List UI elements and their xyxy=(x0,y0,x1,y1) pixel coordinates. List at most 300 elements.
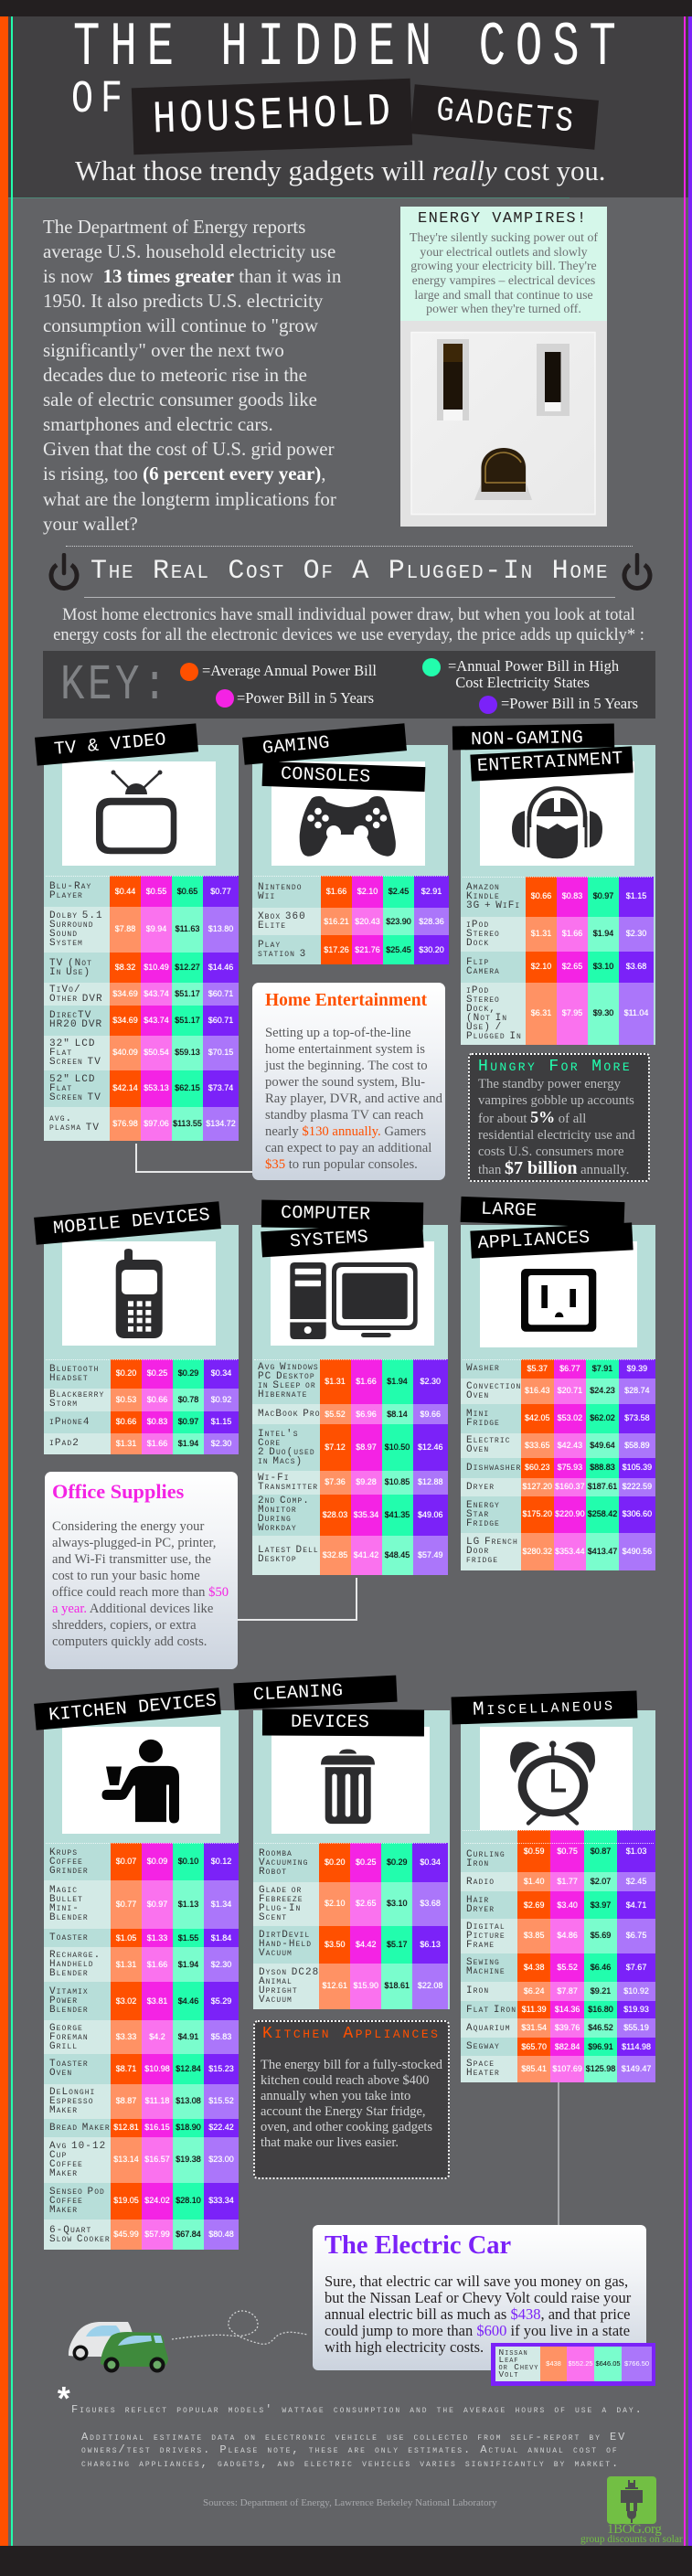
table: computer system costs: $12.88 xyxy=(418,1477,443,1486)
heading tag: kitchen devices: KITCHEN DEVICES xyxy=(48,1690,218,1725)
callout text: nearly $130 annually. Gamers xyxy=(265,1124,426,1139)
table: mobile device costs: Headset xyxy=(49,1373,89,1384)
table: computer system costs: Hibernate xyxy=(258,1389,307,1400)
table: kitchen device costs: $0.07 xyxy=(116,1857,136,1866)
heading tag: computer: COMPUTER xyxy=(281,1203,371,1226)
table: kitchen device costs: Coffee xyxy=(49,2159,83,2170)
table: kitchen device costs: Coffee xyxy=(49,2196,83,2207)
callout text: always-plugged-in PC, printer, xyxy=(52,1536,216,1550)
table: non-gaming entertainment costs: $3.10 xyxy=(593,962,613,971)
table: miscellaneous costs: $55.19 xyxy=(623,2023,649,2032)
table: mobile device costs: Storm xyxy=(49,1399,78,1410)
callout text: Ray player, DVR, and active and xyxy=(265,1091,442,1106)
table: mobile device costs: Blackberry xyxy=(49,1389,104,1400)
table: kitchen device costs: $2.30 xyxy=(211,1960,231,1969)
callout heading: Home Entertainment xyxy=(265,991,427,1010)
table: miscellaneous costs: $2.45 xyxy=(626,1877,646,1886)
intro paragraph: Given that the cost of U.S. grid power xyxy=(43,438,335,460)
intro paragraph: The Department of Energy reports xyxy=(43,216,305,238)
table: kitchen device costs: $0.77 xyxy=(116,1900,136,1909)
table: large appliance costs: $175.20 xyxy=(523,1509,552,1518)
table: cleaning device costs: $6.13 xyxy=(420,1940,441,1949)
table: electric car costs xyxy=(491,2343,655,2386)
table: mobile device costs: $0.34 xyxy=(211,1368,231,1378)
table: kitchen device costs: Grinder xyxy=(49,1866,89,1877)
panel: TV and video xyxy=(44,745,239,1141)
table: large appliance costs: $222.59 xyxy=(623,1482,652,1491)
table: TV and video costs: TiVo/ xyxy=(49,985,81,995)
table: miscellaneous costs: Iron xyxy=(466,1858,489,1869)
table: TV and video costs: $60.71 xyxy=(208,1016,233,1025)
title line: the hidden cost: THE HIDDEN COST xyxy=(73,13,626,83)
table: kitchen device costs xyxy=(44,1843,239,2250)
title label: household xyxy=(132,79,412,154)
icon: green robot plug xyxy=(607,2476,656,2524)
table: TV and video costs: $14.46 xyxy=(208,963,233,972)
table: computer system costs: $1.94 xyxy=(387,1377,408,1386)
intro paragraph: decades due to meteoric rise in the xyxy=(43,364,307,386)
table: mobile device costs: $0.92 xyxy=(211,1395,231,1404)
legend text: high cost xyxy=(448,657,619,691)
table: large appliance costs: Electric xyxy=(466,1435,511,1446)
table: kitchen device costs: $1.34 xyxy=(211,1900,231,1909)
table: non-gaming entertainment costs: Amazon xyxy=(466,882,500,893)
callout: kitchen appliances xyxy=(253,2020,450,2179)
table: TV and video costs: $134.72 xyxy=(206,1119,236,1128)
table: kitchen device costs: $3.81 xyxy=(147,1996,167,2006)
table: kitchen device costs: Grill xyxy=(49,2041,78,2052)
callout text: for about 5% of all xyxy=(478,1108,586,1126)
table: cleaning device costs: $12.61 xyxy=(323,1981,347,1990)
footnote: additional data: owners/test drivers. Please note, these are only estimates. Actual annual cost of xyxy=(81,2443,619,2456)
heading tag: TV and video: TV & VIDEO xyxy=(53,729,166,761)
callout text: computers quickly add costs. xyxy=(52,1634,207,1649)
table: TV and video costs: Player xyxy=(49,890,83,901)
callout text xyxy=(261,2058,442,2150)
table: TV and video costs: $34.69 xyxy=(112,1016,138,1025)
table: large appliance costs: Oven xyxy=(466,1390,489,1401)
heading tag: large: LARGE xyxy=(480,1199,537,1222)
table: gaming console costs: Nintendo xyxy=(258,882,303,893)
table: cleaning device costs: Scent xyxy=(259,1912,287,1923)
heading tag: gaming xyxy=(242,723,407,764)
table: non-gaming entertainment costs: $1.15 xyxy=(626,891,646,900)
table: computer system costs: Monitor xyxy=(258,1505,297,1516)
panel: computer systems xyxy=(252,1225,448,1575)
panel: miscellaneous xyxy=(461,1710,655,2082)
table: mobile device costs xyxy=(44,1359,239,1454)
table: non-gaming entertainment costs: $1.66 xyxy=(562,929,582,938)
table: TV and video costs: $13.80 xyxy=(208,924,233,933)
heading tag: cleaning xyxy=(233,1676,398,1709)
table: miscellaneous costs: Dryer xyxy=(466,1904,495,1915)
table: computer system costs: $6.96 xyxy=(356,1410,377,1419)
table: cleaning device costs: $2.10 xyxy=(325,1899,346,1908)
table: non-gaming entertainment costs: $2.65 xyxy=(562,962,582,971)
section intro text: Most home electronics have small individual power draw, but when you look at total xyxy=(62,606,635,624)
table: mobile device costs: $1.15 xyxy=(211,1417,231,1426)
table: large appliance costs: $58.89 xyxy=(624,1441,650,1450)
table: miscellaneous costs: $65.70 xyxy=(521,2042,547,2051)
heading tag: non-gaming xyxy=(452,723,614,750)
table: miscellaneous costs: Flat Iron xyxy=(466,2004,516,2015)
callout heading: Hungry For More xyxy=(478,1058,632,1076)
heading tag: large xyxy=(460,1197,624,1228)
table: kitchen device costs: $12.81 xyxy=(113,2123,139,2132)
heading tag: entertainment: ENTERTAINMENT xyxy=(476,749,623,777)
table: miscellaneous costs: Segway xyxy=(466,2041,500,2052)
callout text: annual electric bill as much as $438, and that price xyxy=(325,2305,630,2323)
table: TV and video costs: $40.09 xyxy=(112,1048,138,1057)
callout text xyxy=(325,2273,631,2356)
title panel xyxy=(0,16,692,197)
table: kitchen device costs: Power xyxy=(49,1996,78,2007)
table: non-gaming entertainment costs: $0.97 xyxy=(593,891,613,900)
heading tag: appliances: APPLIANCES xyxy=(476,1228,591,1254)
table: TV and video costs: $97.06 xyxy=(144,1119,169,1128)
table: large appliance costs: $280.32 xyxy=(523,1547,552,1556)
table: computer system costs: $7.12 xyxy=(325,1442,346,1452)
table: miscellaneous costs: $9.21 xyxy=(591,1986,611,1996)
icon: person with headphones xyxy=(480,761,634,866)
table: computer system costs: in Macs) xyxy=(258,1456,303,1467)
title word: of: OF xyxy=(71,74,130,126)
callout text: shredders, copiers, or extra xyxy=(52,1618,197,1633)
table: large appliance costs: Dishwasher xyxy=(466,1463,521,1474)
callout text: costs U.S. consumers more xyxy=(478,1144,624,1159)
table: kitchen device costs: $19.38 xyxy=(176,2155,201,2164)
subtitle: What those trendy gadgets will really cost you. xyxy=(75,155,605,186)
table: non-gaming entertainment costs: $0.66 xyxy=(531,891,551,900)
icon: electric outlet xyxy=(480,1241,637,1347)
table: miscellaneous costs: Sewing xyxy=(466,1957,500,1968)
table: cleaning device costs: Roomba xyxy=(259,1848,293,1859)
table: gaming console costs: $1.66 xyxy=(326,887,346,896)
table: kitchen device costs: $0.12 xyxy=(211,1857,231,1866)
table: mobile device costs: $0.20 xyxy=(116,1368,136,1378)
table: large appliance costs: $187.61 xyxy=(588,1482,617,1491)
table: gaming console costs: $16.21 xyxy=(324,917,349,926)
table: gaming console costs: $20.43 xyxy=(355,917,380,926)
label: nissan leaf or chevy volt: Leaf xyxy=(499,2355,518,2365)
vampires heading: ENERGY VAMPIRES! xyxy=(418,210,588,228)
table: kitchen device costs: Blender xyxy=(49,1912,89,1923)
callout: home entertainment xyxy=(252,983,445,1180)
table: non-gaming entertainment costs: Stereo xyxy=(466,929,500,940)
table: cleaning device costs: $3.50 xyxy=(325,1940,346,1949)
table: cleaning device costs: Febreeze xyxy=(259,1894,303,1905)
table: miscellaneous costs: $4.86 xyxy=(557,1931,578,1940)
table: TV and video costs: $0.44 xyxy=(115,887,135,896)
callout heading: Office Supplies xyxy=(52,1480,184,1503)
table: computer system costs: $7.36 xyxy=(325,1477,346,1486)
table: miscellaneous costs: $5.69 xyxy=(591,1931,611,1940)
table: TV and video costs: $59.13 xyxy=(175,1048,200,1057)
intro paragraph: 1950. It also predicts U.S. electricity xyxy=(43,290,323,312)
table: kitchen device costs: Oven xyxy=(49,2068,72,2079)
table: TV and video costs: $76.98 xyxy=(112,1119,138,1128)
callout text xyxy=(52,1519,229,1649)
table: cleaning device costs: Upright xyxy=(259,1985,298,1996)
table: kitchen device costs: $13.08 xyxy=(176,2096,201,2105)
table: miscellaneous costs: Space xyxy=(466,2059,495,2070)
table: cleaning device costs: $15.90 xyxy=(354,1981,378,1990)
heading tag: devices: DEVICES xyxy=(291,1711,369,1733)
table: kitchen device costs: $5.83 xyxy=(211,2032,231,2041)
heading tag: mobile devices: MOBILE DEVICES xyxy=(52,1205,210,1240)
value: 552.25: $552.25 xyxy=(568,2359,593,2368)
table: kitchen device costs: Blender xyxy=(49,1968,89,1979)
table: kitchen device costs: $1.31 xyxy=(116,1960,136,1969)
callout text: The energy bill for a fully-stocked xyxy=(261,2058,442,2072)
table: kitchen device costs: $15.52 xyxy=(208,2096,234,2105)
intro paragraph: consumption will continue to "grow xyxy=(43,314,318,336)
table: large appliance costs: $73.58 xyxy=(624,1413,650,1422)
intro paragraph: average U.S. household electricity use xyxy=(43,240,335,262)
table: miscellaneous costs: Aquarium xyxy=(466,2023,511,2034)
value: 646.05: $646.05 xyxy=(595,2359,621,2368)
table: kitchen device costs: $1.55 xyxy=(178,1933,198,1943)
table: TV and video costs: $12.27 xyxy=(175,963,200,972)
table: kitchen device costs: DeLonghi xyxy=(49,2087,95,2098)
table: non-gaming entertainment costs: $11.04 xyxy=(624,1008,648,1017)
table: TV and video costs: $51.17 xyxy=(175,989,200,998)
table: TV and video costs: Flat xyxy=(49,1083,72,1094)
table: computer system costs: $49.06 xyxy=(418,1510,443,1519)
table: TV and video costs: $0.65 xyxy=(177,887,197,896)
table: miscellaneous costs: $10.92 xyxy=(623,1986,649,1996)
table: miscellaneous costs: $2.07 xyxy=(591,1877,611,1886)
value: 766.50: $766.50 xyxy=(624,2359,649,2368)
table: kitchen device costs: $67.84 xyxy=(176,2230,201,2239)
table: cleaning device costs: Robot xyxy=(259,1867,287,1878)
callout text: Setting up a top-of-the-line xyxy=(265,1026,410,1040)
table: non-gaming entertainment costs: $1.94 xyxy=(593,929,613,938)
table: miscellaneous costs: $82.84 xyxy=(555,2042,580,2051)
table: computer system costs: PC Desktop xyxy=(258,1371,315,1382)
arrow: connector computers to office supplies xyxy=(238,1578,357,1621)
table: miscellaneous costs: $1.77 xyxy=(557,1877,578,1886)
table: kitchen device costs: $12.84 xyxy=(176,2064,201,2073)
panel: energy vampires xyxy=(400,207,607,527)
table: miscellaneous costs: $7.87 xyxy=(557,1986,578,1996)
table: large appliance costs: $105.39 xyxy=(623,1463,652,1472)
table: computer system costs: $35.34 xyxy=(354,1510,378,1519)
table: non-gaming entertainment costs: Flip xyxy=(466,957,489,968)
callout text: with high electricity costs. xyxy=(325,2338,484,2356)
table: large appliance costs: $5.37 xyxy=(527,1364,548,1373)
table: miscellaneous costs: $107.69 xyxy=(552,2064,582,2073)
table: kitchen device costs: $1.66 xyxy=(147,1960,167,1969)
table: kitchen device costs: $4.91 xyxy=(178,2032,198,2041)
table: TV and video costs: $8.32 xyxy=(115,963,135,972)
table: kitchen device costs: $45.99 xyxy=(113,2230,139,2239)
table: TV and video costs: $9.94 xyxy=(146,924,166,933)
table: large appliance costs: Door xyxy=(466,1546,489,1557)
callout text: vampires gobble up accounts xyxy=(478,1093,634,1108)
table: large appliance costs: $16.43 xyxy=(525,1386,550,1395)
table: large appliance costs: $62.02 xyxy=(590,1413,615,1422)
table: non-gaming entertainment costs: Use) / xyxy=(466,1022,502,1033)
callout text: than $7 billion annually. xyxy=(478,1158,629,1178)
table: large appliance costs: Washer xyxy=(466,1363,500,1374)
table: cleaning device costs: $0.25 xyxy=(356,1857,377,1867)
callout text: The standby power energy xyxy=(478,1077,621,1091)
table: miscellaneous costs: $4.38 xyxy=(524,1963,544,1972)
table: mobile device costs: $1.66 xyxy=(147,1439,167,1448)
callout text: and Wi-Fi transmitter use, the xyxy=(52,1552,211,1567)
table: TV and video costs: $51.17 xyxy=(175,1016,200,1025)
table: kitchen device costs: Toaster xyxy=(49,2059,89,2070)
table: non-gaming entertainment costs: Dock xyxy=(466,938,489,949)
table: miscellaneous costs: $14.36 xyxy=(555,2005,580,2014)
label: nissan leaf or chevy volt: Nissan xyxy=(499,2347,528,2358)
table: gaming console costs: $23.90 xyxy=(386,917,411,926)
icon: person with cup xyxy=(62,1726,220,1834)
table: large appliance costs: $306.60 xyxy=(623,1509,652,1518)
table: large appliance costs: Oven xyxy=(466,1444,489,1455)
table: kitchen device costs: Cup xyxy=(49,2150,67,2161)
table: large appliance costs: $160.37 xyxy=(555,1482,585,1491)
heading tag: systems: SYSTEMS xyxy=(289,1227,369,1252)
table: kitchen device costs: Toaster xyxy=(49,1932,89,1943)
callout text: account the Energy Star fridge, xyxy=(261,2104,426,2119)
callout text: home entertainment system is xyxy=(265,1042,425,1057)
table: miscellaneous costs: Digital xyxy=(466,1921,506,1932)
table: TV and video costs: $11.63 xyxy=(176,924,199,933)
intro paragraph: is now 13 times greater than it was in xyxy=(43,265,341,287)
table: TV and video costs: 32" LCD xyxy=(49,1038,96,1049)
table: TV and video costs: $7.88 xyxy=(115,924,135,933)
table: TV and video costs: Dolby 5.1 xyxy=(49,910,103,921)
vampires body text: your electrical outlets and slowly xyxy=(420,245,588,259)
table: cleaning device costs: Vacuum xyxy=(259,1948,293,1959)
icon: desktop computer xyxy=(271,1241,434,1346)
table: mobile device costs: $2.30 xyxy=(211,1439,231,1448)
intro paragraph: significantly" over the next two xyxy=(43,339,284,361)
footnote asterisk: * xyxy=(54,2383,74,2421)
table: miscellaneous costs: Hair xyxy=(466,1895,489,1906)
table: kitchen device costs: $15.23 xyxy=(208,2064,234,2073)
heading tag: miscellaneous xyxy=(451,1690,637,1725)
table: kitchen device costs: $13.14 xyxy=(113,2155,139,2164)
table: kitchen device costs: $18.90 xyxy=(176,2123,201,2132)
callout text: $35 to run popular consoles. xyxy=(265,1157,418,1172)
table: TV and video costs: $50.54 xyxy=(144,1048,169,1057)
icon: electric cars with dashed trail xyxy=(68,2310,307,2373)
intro paragraph: smartphones and electric cars. xyxy=(43,413,273,435)
table: large appliance costs: Convection xyxy=(466,1381,521,1392)
table: large appliance costs: $60.23 xyxy=(525,1463,550,1472)
table: TV and video costs: $10.49 xyxy=(144,963,169,972)
table: TV and video costs: Blu-Ray xyxy=(49,881,91,892)
table: kitchen device costs: $5.29 xyxy=(211,1996,231,2006)
table: kitchen device costs: Foreman xyxy=(49,2032,89,2043)
table: miscellaneous costs: $5.52 xyxy=(557,1963,578,1972)
table: kitchen device costs: 6-Quart xyxy=(49,2225,91,2236)
table: kitchen device costs: $80.48 xyxy=(208,2230,234,2239)
table: miscellaneous costs: $0.87 xyxy=(591,1847,611,1856)
table: miscellaneous costs: Machine xyxy=(466,1966,506,1977)
table: kitchen device costs: $0.10 xyxy=(178,1857,198,1866)
callout text: Sure, that electric car will save you money on gas, xyxy=(325,2273,628,2290)
table: miscellaneous costs: Radio xyxy=(466,1877,495,1888)
table: kitchen device costs: $3.02 xyxy=(116,1996,136,2006)
table: cleaning device costs: $0.20 xyxy=(325,1857,346,1867)
table: cleaning device costs: Hand-Held xyxy=(259,1939,312,1950)
table: kitchen device costs: $10.98 xyxy=(144,2064,170,2073)
heading tag: computer xyxy=(261,1199,423,1230)
panel: gaming consoles xyxy=(252,745,448,964)
table: non-gaming entertainment costs: Plugged In xyxy=(466,1031,522,1042)
intro paragraph: what are the longterm implications for xyxy=(43,488,336,510)
table: TV and video costs: $43.74 xyxy=(144,1016,169,1025)
icon: power symbol left xyxy=(49,553,79,591)
heading tag: gaming: GAMING xyxy=(261,732,331,760)
table: non-gaming entertainment costs: 3G + WiFi xyxy=(466,900,520,911)
section intro text: energy costs for all the electronic devices we use everyday, the price adds up quickly* : xyxy=(53,626,644,644)
table: miscellaneous costs: $6.24 xyxy=(524,1986,544,1996)
vampires body text: large and small that continue to use xyxy=(414,288,593,302)
table: large appliance costs: $75.93 xyxy=(558,1463,582,1472)
heading tag: appliances xyxy=(470,1222,633,1259)
table: miscellaneous costs: $1.03 xyxy=(626,1847,646,1856)
table: kitchen device costs: $16.57 xyxy=(144,2155,170,2164)
table: miscellaneous costs: $3.97 xyxy=(591,1900,611,1910)
table: gaming console costs xyxy=(252,876,449,964)
table: kitchen device costs: $0.97 xyxy=(147,1900,167,1909)
table: kitchen device costs: Blender xyxy=(49,2005,89,2016)
top bar xyxy=(0,0,692,16)
value: 438: $438 xyxy=(546,2359,561,2368)
table: kitchen device costs: $8.87 xyxy=(116,2096,136,2105)
table: computer system costs: $28.03 xyxy=(323,1510,347,1519)
table: kitchen device costs: $4.2 xyxy=(149,2032,165,2041)
table: cleaning device costs: Vacuuming xyxy=(259,1857,308,1868)
table: miscellaneous costs: $39.76 xyxy=(555,2023,580,2032)
table: computer system costs: Transmitter xyxy=(258,1482,318,1493)
callout text: can expect to pay an additional xyxy=(265,1141,431,1155)
title label: gadgets xyxy=(410,84,599,150)
table: computer system costs: $8.14 xyxy=(387,1410,408,1419)
arrow: connector miscellaneous to electric car xyxy=(558,2082,559,2225)
heading tag: consoles xyxy=(261,761,425,792)
table: gaming console costs: $2.91 xyxy=(421,887,442,896)
table: mobile device costs: Bluetooth xyxy=(49,1364,99,1375)
table: miscellaneous costs: Frame xyxy=(466,1940,495,1951)
legend text: high cost: =Annual Power Bill in High xyxy=(448,657,619,675)
heading tag: mobile devices xyxy=(34,1201,220,1244)
table: TV and video costs: $43.74 xyxy=(144,989,169,998)
table: gaming console costs: $28.36 xyxy=(419,917,444,926)
legend dot: power bill 5 years xyxy=(216,689,234,708)
table: computer system costs: $9.66 xyxy=(420,1410,441,1419)
table: kitchen device costs: Maker xyxy=(49,2105,78,2116)
callout text xyxy=(478,1077,635,1178)
table: miscellaneous costs: Heater xyxy=(466,2068,500,2079)
legend text: power bill 5 years: =Power Bill in 5 Years xyxy=(237,689,374,707)
table: computer system costs: Wi-Fi xyxy=(258,1473,290,1484)
value: 646.05 xyxy=(594,2347,622,2381)
table: large appliance costs: Fridge xyxy=(466,1418,500,1429)
table: gaming console costs: $17.26 xyxy=(324,945,349,954)
table: non-gaming entertainment costs: Camera xyxy=(466,966,500,977)
table: kitchen device costs: Bullet xyxy=(49,1894,83,1905)
table: non-gaming entertainment costs: iPod xyxy=(466,920,489,931)
table: non-gaming entertainment costs: Stereo xyxy=(466,995,500,1006)
table: TV and video costs: $0.55 xyxy=(146,887,166,896)
label: nissan leaf or chevy volt: or Chevy xyxy=(499,2362,538,2372)
